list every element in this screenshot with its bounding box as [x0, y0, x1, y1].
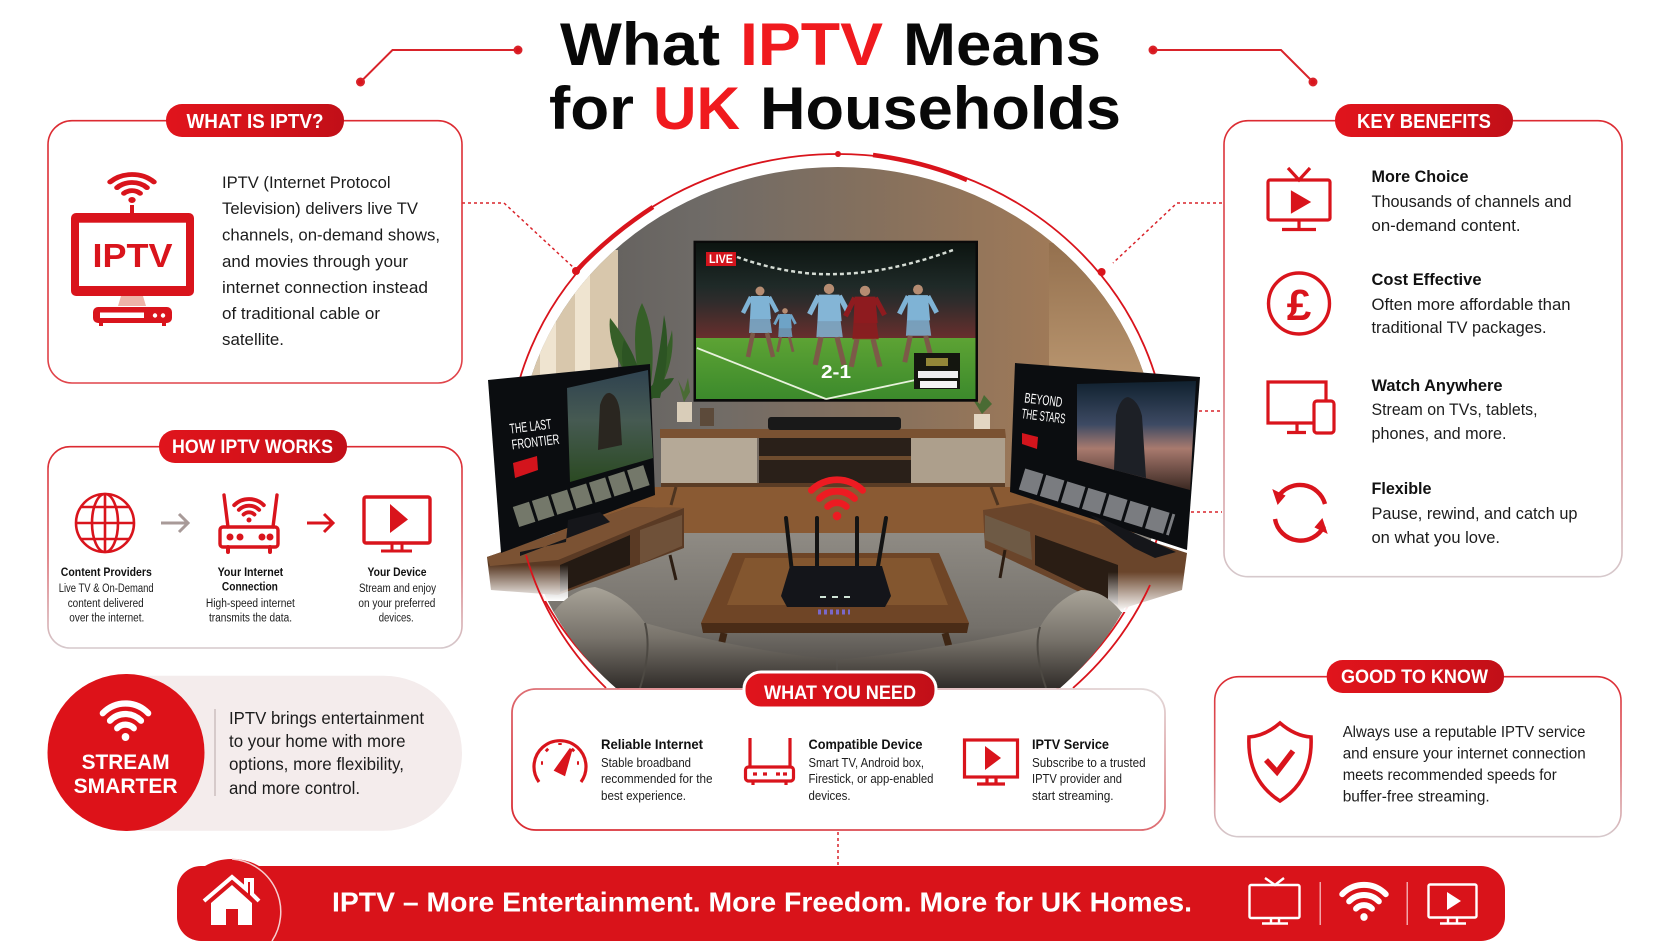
body text: channels, on-demand shows,: [222, 226, 440, 245]
body text: of traditional cable or: [222, 304, 380, 323]
icon: globe: [76, 494, 134, 552]
title: UK: [653, 75, 740, 142]
plant: [606, 303, 674, 400]
right tv heading: BEYOND: [1024, 389, 1063, 410]
step: internet connection: Your Internet: [218, 565, 283, 579]
left tv button: [513, 456, 538, 478]
step: content providers: Live TV & On-Demand: [59, 583, 154, 595]
players: [743, 284, 937, 367]
need: IPTV service: [1032, 736, 1146, 803]
home badge: [204, 859, 281, 941]
need: reliable internet: Reliable Internet: [601, 736, 703, 752]
body text: IPTV (Internet Protocol: [222, 173, 390, 192]
step: internet connection: Connection: [222, 580, 278, 594]
benefit: cost effective: traditional TV packages.: [1372, 318, 1546, 337]
panel: stream smarter: [48, 674, 462, 831]
small plants and vases: [677, 378, 992, 429]
heading pill: [744, 672, 936, 708]
icon: pound: [1268, 273, 1330, 334]
benefit: watch anywhere: Stream on TVs, tablets,: [1372, 400, 1538, 419]
body text: [222, 173, 440, 349]
icon: IPTV monitor: IPTV: [92, 237, 172, 274]
icon: router: [220, 495, 278, 552]
title: [549, 11, 1121, 142]
need: compatible device: Smart TV, Android box,: [808, 756, 924, 770]
right tv button: [1022, 433, 1038, 449]
need: reliable internet: Stable broadband: [601, 756, 691, 770]
benefit: flexible: [1372, 479, 1578, 547]
need: reliable internet: best experience.: [601, 789, 686, 803]
step: device: Stream and enjoy: [359, 583, 436, 595]
body text: Always use a reputable IPTV service: [1343, 724, 1585, 741]
need: IPTV service: IPTV Service: [1032, 736, 1109, 752]
slogan: IPTV – More Entertainment. More Freedom. More for UK Homes.: [332, 887, 1192, 918]
message text: [229, 708, 424, 798]
lower ring arcs: [526, 555, 1150, 688]
body text: Television) delivers live TV: [222, 199, 419, 218]
right tv heading: [1021, 389, 1068, 426]
message text: IPTV brings entertainment: [229, 708, 424, 728]
left tv heading: FRONTIER: [511, 431, 560, 452]
need: compatible device: devices.: [808, 789, 850, 803]
heading pill: [166, 104, 344, 137]
icon: refresh: [1274, 485, 1326, 541]
right cabinet: [983, 503, 1193, 612]
panel: what is IPTV: [48, 104, 462, 383]
icon: gauge: [534, 741, 586, 782]
step: device: [358, 565, 436, 625]
benefit: more choice: More Choice: [1372, 167, 1468, 186]
need: IPTV service: Subscribe to a trusted: [1032, 756, 1146, 770]
need: IPTV service: start streaming.: [1032, 789, 1114, 803]
panel: good to know: [1215, 660, 1621, 837]
icon: play monitor: [1428, 884, 1476, 924]
outer red ring: [508, 151, 1168, 766]
sofas: [545, 587, 1130, 690]
step: internet connection: High-speed internet: [206, 598, 296, 610]
coffee table: [701, 553, 969, 650]
body text: internet connection instead: [222, 278, 428, 297]
body text: and ensure your internet connection: [1343, 746, 1586, 762]
message text: options, more flexibility,: [229, 754, 404, 774]
step: internet connection: [206, 565, 296, 625]
panel: key benefits: [1224, 104, 1622, 577]
connector: title left: [357, 46, 522, 86]
step: device: Your Device: [368, 565, 427, 579]
main television: [694, 241, 978, 402]
bottom banner: [177, 859, 1505, 941]
need: compatible device: [808, 736, 934, 803]
benefit: flexible: Flexible: [1372, 479, 1432, 498]
need: IPTV service: IPTV provider and: [1032, 772, 1122, 786]
arrow: [307, 514, 333, 532]
step: content providers: content delivered: [68, 598, 144, 610]
benefit: watch anywhere: Watch Anywhere: [1372, 376, 1502, 395]
icon: devices: [1268, 382, 1334, 433]
right tv thumbnails: [1022, 479, 1172, 525]
panel: what you need: [512, 672, 1165, 830]
heading pill: GOOD TO KNOW: [1341, 666, 1489, 688]
right television: [1010, 363, 1200, 558]
title: IPTV: [740, 11, 883, 78]
message text: to your home with more: [229, 731, 406, 751]
need: compatible device: Compatible Device: [808, 736, 923, 752]
benefit: more choice: on-demand content.: [1372, 216, 1520, 235]
live badge: LIVE: [709, 254, 733, 266]
step: content providers: Content Providers: [61, 565, 152, 579]
body text: satellite.: [222, 330, 284, 349]
icon: screen play: [964, 740, 1018, 784]
body text: and movies through your: [222, 252, 408, 271]
benefit: cost effective: [1372, 270, 1570, 337]
icon: pound: £: [1287, 281, 1312, 330]
step: device: devices.: [379, 613, 414, 625]
title: Means: [903, 11, 1101, 78]
soundbar: [768, 417, 901, 430]
badge circle: SMARTER: [74, 774, 178, 798]
heading pill: WHAT YOU NEED: [764, 682, 916, 704]
right tv heading: THE STARS: [1021, 405, 1066, 426]
step: device: on your preferred: [358, 598, 435, 610]
icon: wifi: [1342, 885, 1386, 921]
connector: title right: [1150, 46, 1316, 86]
left cabinet: [480, 507, 684, 601]
heading pill: [1335, 104, 1513, 137]
heading pill: [159, 430, 347, 463]
badge circle: STREAM: [82, 750, 170, 774]
arrow: [161, 514, 188, 532]
benefit: cost effective: Cost Effective: [1372, 270, 1482, 289]
benefit: flexible: Pause, rewind, and catch up: [1372, 504, 1578, 523]
title: What: [560, 11, 720, 78]
rug: [500, 533, 1180, 690]
left tv heading: THE LAST: [509, 416, 553, 437]
sideboard: [660, 429, 1006, 505]
title: for: [549, 75, 634, 142]
router: [781, 518, 891, 612]
icon: tv: [1268, 168, 1330, 230]
heading pill: HOW IPTV WORKS: [172, 436, 333, 458]
wifi signal: [811, 480, 863, 520]
left television: [488, 364, 655, 556]
body text: meets recommended speeds for: [1343, 767, 1557, 784]
panel: how IPTV works: [48, 430, 462, 648]
icon: device: [364, 497, 430, 551]
benefit: flexible: on what you love.: [1372, 528, 1500, 547]
benefit: more choice: Thousands of channels and: [1372, 192, 1572, 211]
room photo: [500, 160, 1180, 690]
benefit: watch anywhere: [1372, 376, 1538, 443]
step: internet connection: transmits the data.: [209, 613, 292, 625]
dashed connectors: [462, 203, 1222, 866]
icon: router: [746, 738, 794, 785]
left tv heading: [509, 415, 560, 452]
score: 2-1: [821, 362, 851, 382]
body text: buffer-free streaming.: [1343, 788, 1490, 806]
message text: and more control.: [229, 778, 360, 798]
icon: IPTV monitor: [71, 175, 194, 326]
badge circle: [48, 674, 204, 831]
need: reliable internet: recommended for the: [601, 772, 713, 786]
heading pill: [1327, 660, 1504, 693]
heading pill: KEY BENEFITS: [1357, 111, 1491, 133]
body text: [1343, 724, 1586, 806]
heading pill: WHAT IS IPTV?: [186, 111, 324, 133]
scoreboard: [914, 353, 960, 389]
title: Households: [760, 75, 1121, 142]
step: content providers: over the internet.: [69, 613, 144, 625]
icon: tv: [1250, 878, 1300, 924]
step: content providers: [59, 565, 154, 625]
icon: shield: [1249, 723, 1311, 801]
need: compatible device: Firestick, or app-enabled: [808, 772, 934, 786]
need: reliable internet: [601, 736, 713, 803]
benefit: watch anywhere: phones, and more.: [1372, 424, 1506, 443]
benefit: more choice: [1372, 167, 1572, 235]
left tv thumbnails: [516, 475, 647, 517]
benefit: cost effective: Often more affordable than: [1372, 295, 1570, 314]
